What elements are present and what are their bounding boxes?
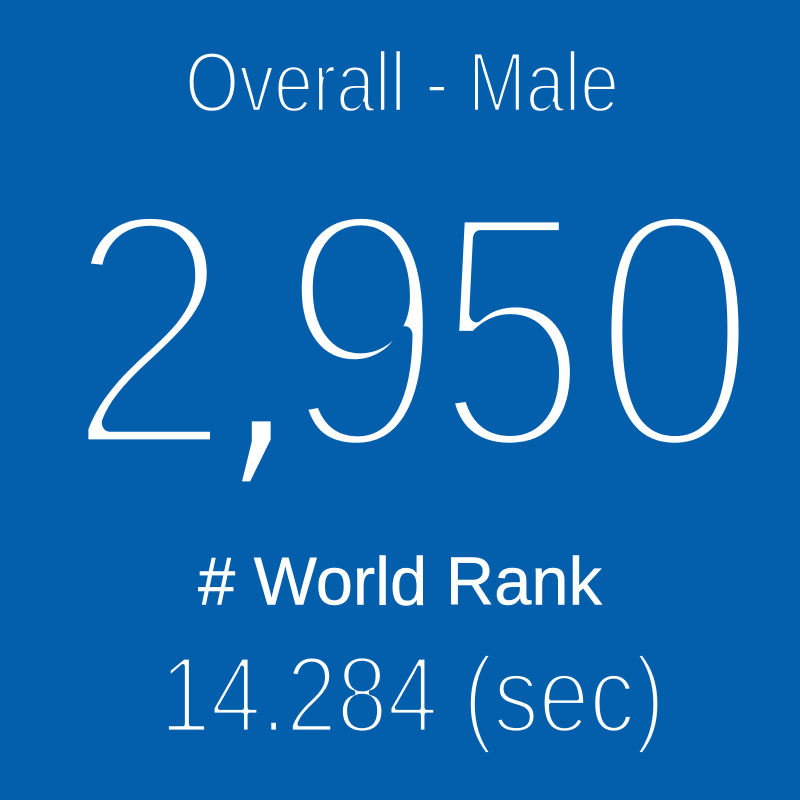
big number: 2 xyxy=(65,139,233,521)
big number: 0 xyxy=(592,139,758,521)
title: Overall - Male xyxy=(185,36,619,130)
big number: 9 xyxy=(280,139,445,521)
label: # World Rank xyxy=(198,544,603,620)
value: 14.284 (sec) xyxy=(160,634,665,756)
big number: 5 xyxy=(435,139,589,521)
big number: , xyxy=(214,180,303,522)
